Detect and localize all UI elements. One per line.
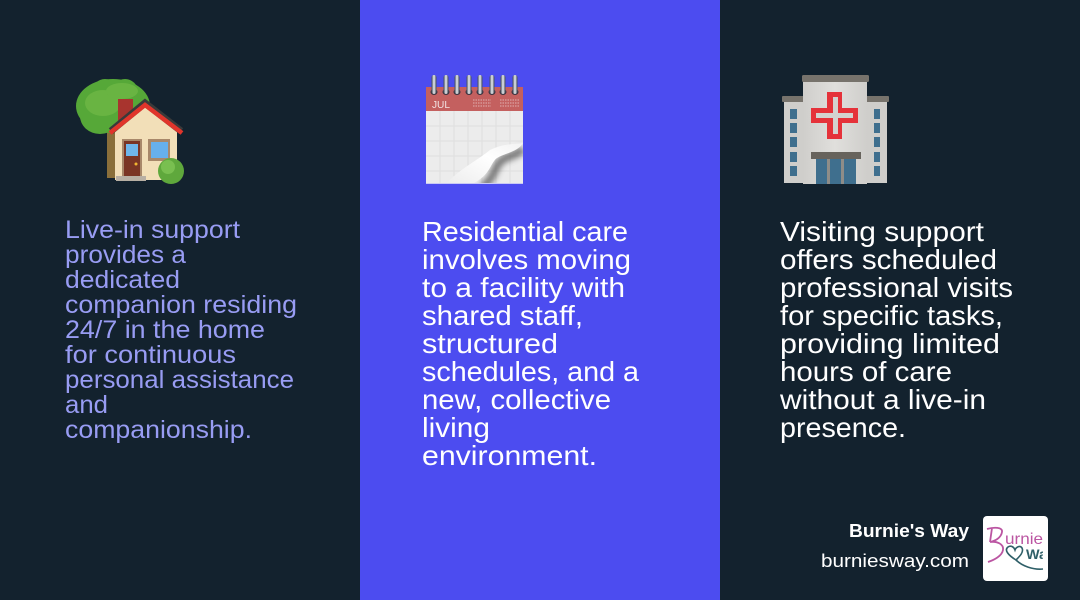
text: visiting support description: providing limited (780, 328, 1000, 359)
text: visiting support description: offers scheduled (780, 244, 997, 275)
text: visiting support description: professional visits (780, 272, 1013, 303)
text: live-in support description: 24/7 in the home (65, 316, 265, 344)
text: residential care description: structured (422, 328, 558, 359)
brand name: Burnie's Way (849, 521, 969, 541)
panel: residential care (360, 0, 720, 600)
text: live-in support description: dedicated (65, 266, 180, 294)
brand website: burniesway.com (821, 551, 969, 571)
text: visiting support description: hours of care (780, 356, 952, 387)
panel: live-in support (0, 0, 360, 600)
icon: hospital (782, 75, 889, 184)
icon: house with tree (76, 79, 184, 184)
text: live-in support description: personal assistance (65, 366, 294, 394)
text: live-in support description: and (65, 391, 108, 419)
icon: calendar (426, 75, 523, 187)
text: live-in support description: companionship. (65, 416, 252, 444)
panel: visiting support (780, 75, 1048, 581)
text: live-in support description: provides a (65, 241, 186, 269)
logo: Burnie's Way (983, 516, 1048, 581)
icon: calendar: JUL (432, 100, 450, 111)
text: live-in support description: companion residing (65, 291, 297, 319)
text: visiting support description: Visiting support (780, 216, 984, 247)
text: visiting support description: presence. (780, 412, 906, 443)
text: residential care description: living (422, 412, 490, 443)
text: residential care description: Residential care (422, 216, 628, 247)
text: live-in support description (65, 216, 297, 444)
text: residential care description: environment. (422, 440, 597, 471)
text: residential care description (422, 216, 639, 471)
text: visiting support description: without a live-in (779, 384, 986, 415)
logo: Burnie's Way: urnie (1005, 531, 1043, 548)
text: visiting support description: for specific tasks, (780, 300, 1003, 331)
text: residential care description: shared staff, (422, 300, 583, 331)
text: residential care description: new, collective (422, 384, 611, 415)
logo: Burnie's Way: Wa (1026, 546, 1047, 562)
text: visiting support description (779, 216, 1013, 443)
text: residential care description: to a facility with (422, 272, 625, 303)
text: residential care description: involves moving (422, 244, 631, 275)
text: live-in support description: Live-in support (65, 216, 240, 244)
text: live-in support description: for continuous (65, 341, 236, 369)
text: residential care description: schedules, and a (422, 356, 639, 387)
